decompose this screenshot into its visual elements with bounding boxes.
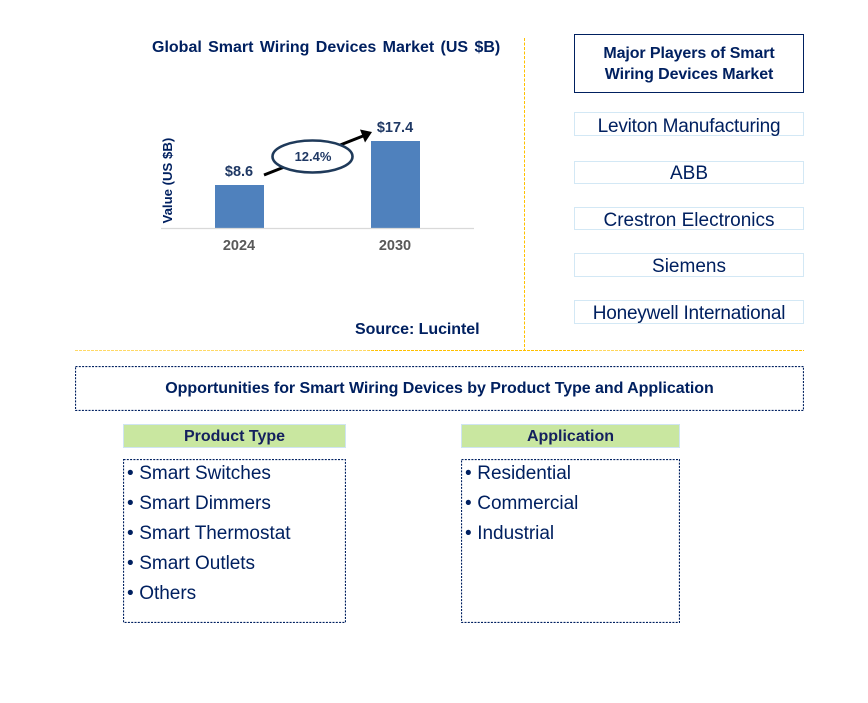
product type list [123, 459, 346, 623]
opportunities heading [75, 366, 804, 411]
product type header [123, 424, 346, 448]
player: Leviton Manufacturing: Leviton Manufacturing [598, 116, 780, 137]
bar: 2024 [215, 185, 264, 228]
player: Honeywell International: Honeywell International [593, 303, 785, 324]
player: Crestron Electronics: Crestron Electronics [603, 210, 775, 231]
product type list: • Others [127, 583, 196, 604]
opportunities heading: Opportunities for Smart Wiring Devices by Product Type and Application [165, 380, 714, 397]
y axis label: Value (US $B) [160, 138, 175, 224]
year label: 2030: 2030 [379, 238, 411, 254]
application header [461, 424, 680, 448]
axis line [161, 228, 474, 230]
value label: 2030: $17.4 [377, 120, 413, 136]
source note: Source: Lucintel [355, 321, 480, 338]
product type list: • Smart Dimmers [127, 493, 271, 514]
chart title: Global Smart Wiring Devices Market (US $B) [152, 39, 500, 56]
application list [461, 459, 680, 623]
application list: • Commercial [465, 493, 578, 514]
year label: 2024: 2024 [223, 238, 255, 254]
player: Siemens: Siemens [652, 256, 726, 277]
major players heading: Wiring Devices Market [605, 66, 773, 83]
CAGR ellipse [272, 140, 352, 172]
bar chart [160, 120, 474, 254]
bar: 2030 [371, 141, 420, 228]
major players heading [574, 34, 804, 93]
product type header: Product Type [184, 428, 285, 445]
application list: • Residential [465, 463, 571, 484]
dashed dividers [75, 38, 804, 351]
CAGR ellipse: 12.4% [295, 149, 332, 164]
major players heading: Major Players of Smart [603, 45, 775, 62]
growth arrow [264, 130, 372, 175]
product type list: • Smart Outlets [127, 553, 255, 574]
player: Leviton Manufacturing [574, 112, 804, 136]
player: Siemens [574, 253, 804, 277]
player: ABB [574, 161, 804, 184]
value label: 2024: $8.6 [225, 164, 253, 180]
product type list: • Smart Switches [127, 463, 271, 484]
player: Crestron Electronics [574, 207, 804, 230]
player: ABB: ABB [670, 163, 708, 184]
application header: Application [527, 428, 614, 445]
product type list: • Smart Thermostat [127, 523, 290, 544]
application list: • Industrial [465, 523, 554, 544]
